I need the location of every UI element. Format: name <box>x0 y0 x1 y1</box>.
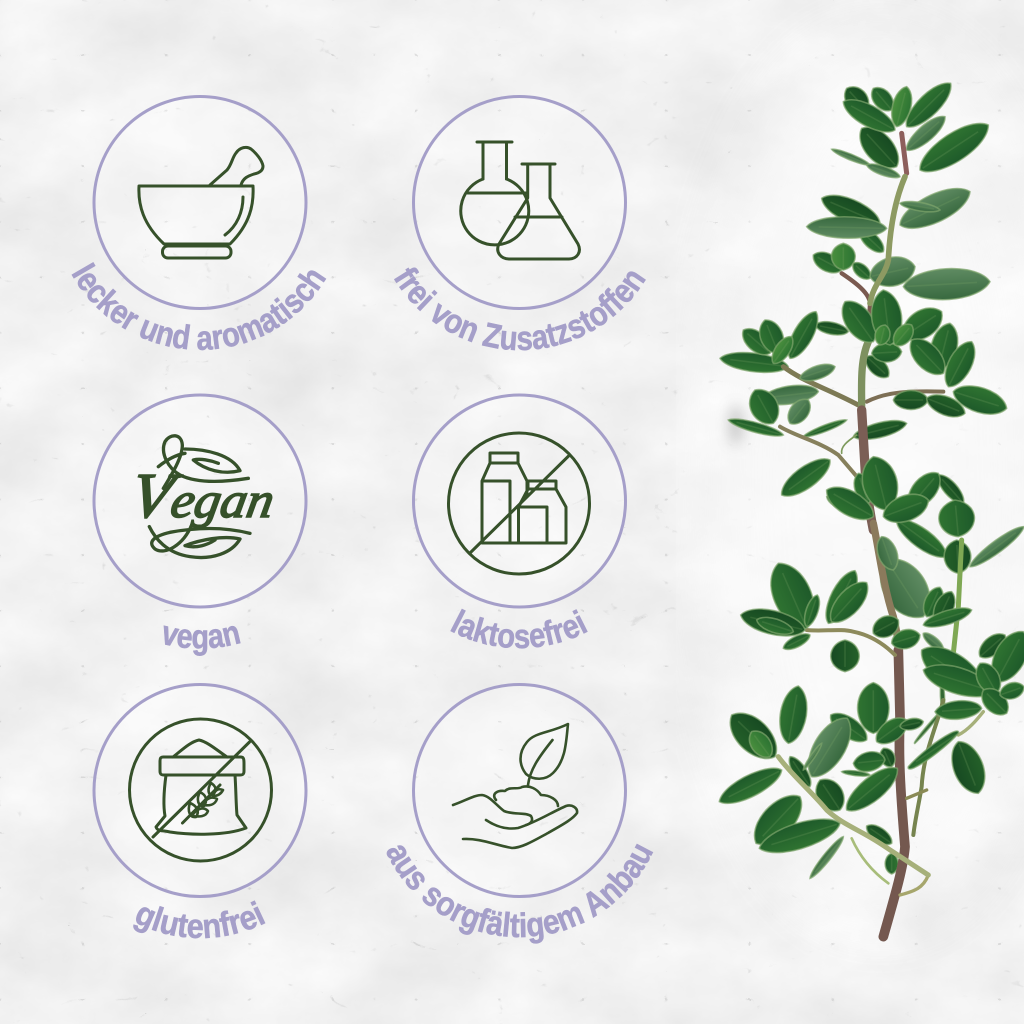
badge ring: flasks <box>414 96 626 308</box>
lower stems <box>778 523 983 937</box>
icon: vegan lettering with leaves: Vegan <box>125 460 281 531</box>
panel: frei von Zusatzstoffen <box>394 95 646 350</box>
icon: mortar and pestle <box>139 147 263 258</box>
lower sprig <box>715 480 1024 937</box>
badge ring: vegan <box>94 395 306 607</box>
badge ring: lactose free <box>414 395 626 607</box>
thyme sprig <box>715 76 1024 937</box>
label: frei von Zusatzstoffen: frei von Zusatzstoffen <box>394 268 646 350</box>
panel: laktosefrei <box>412 394 627 649</box>
label: laktosefrei: laktosefrei <box>450 608 588 649</box>
label: glutenfrei: glutenfrei <box>133 900 266 938</box>
panel: vegan <box>92 394 308 656</box>
upper stems <box>780 133 943 530</box>
label: vegan: vegan <box>164 625 241 656</box>
icon: hand holding seedling <box>453 724 577 848</box>
icon: crossed-out milk cartons <box>448 433 590 574</box>
badge ring: mortar <box>94 96 306 308</box>
panel: glutenfrei <box>92 683 308 938</box>
panel: lecker und aromatisch <box>72 95 326 350</box>
icon: laboratory flasks <box>461 142 579 259</box>
icon: vegan lettering with leaves <box>125 436 281 557</box>
badge ring: cultivation <box>414 684 626 896</box>
icon: crossed-out flour sack <box>130 719 272 861</box>
badge ring: gluten free <box>94 684 306 896</box>
panel: aus sorgfaeltigem Anbau <box>386 683 654 944</box>
label: aus sorgfaeltigem Anbau: aus sorgfältigem Anbau <box>386 844 654 944</box>
upper sprig <box>719 76 1010 530</box>
label: lecker und aromatisch: lecker und aromatisch <box>72 262 326 350</box>
